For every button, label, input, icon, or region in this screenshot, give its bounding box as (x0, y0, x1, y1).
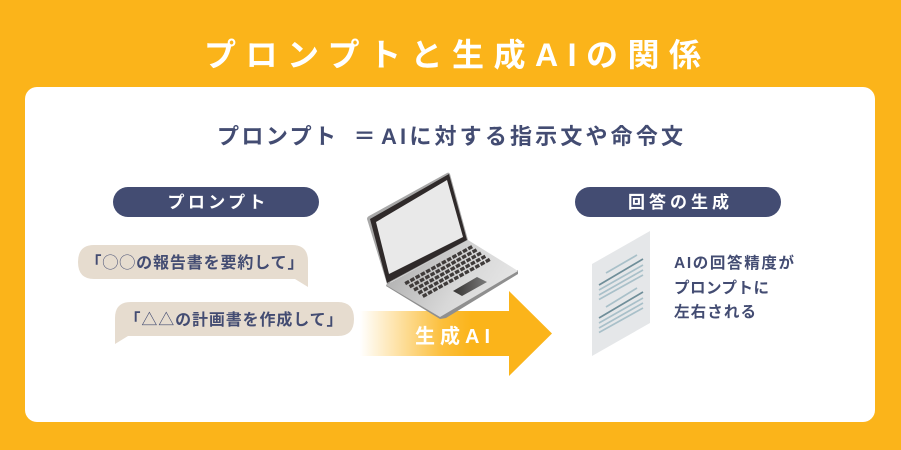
text: answer accuracy note: 左右される (674, 303, 756, 321)
arrow: generative AI (360, 291, 552, 376)
arrow: generative AI: 生成AI (415, 324, 490, 348)
speech bubble: create plan: 「△△の計画書を作成して」 (124, 310, 342, 329)
label: prompt pill (113, 187, 319, 217)
speech bubble: summarize report: 「◯◯の報告書を要約して」 (86, 253, 304, 272)
text: answer accuracy note: AIの回答精度が (674, 253, 794, 272)
text: answer accuracy note (674, 253, 794, 321)
subtitle (217, 124, 683, 149)
subtitle: AIに対する指示文や命令文 (381, 124, 683, 149)
label: prompt pill: プロンプト (168, 193, 266, 212)
subtitle: ＝ (354, 124, 376, 149)
text: answer accuracy note: プロンプトに (674, 279, 769, 297)
title: プロンプトと生成AIの関係 (204, 37, 701, 73)
speech bubble: create plan (115, 302, 354, 344)
speech bubble: summarize report (78, 245, 308, 287)
panel: main card (25, 87, 875, 422)
subtitle: プロンプト (217, 124, 336, 149)
label: answer generation pill (575, 187, 781, 217)
icon: document (592, 231, 650, 356)
label: answer generation pill: 回答の生成 (628, 192, 729, 212)
icon: laptop (367, 173, 518, 319)
